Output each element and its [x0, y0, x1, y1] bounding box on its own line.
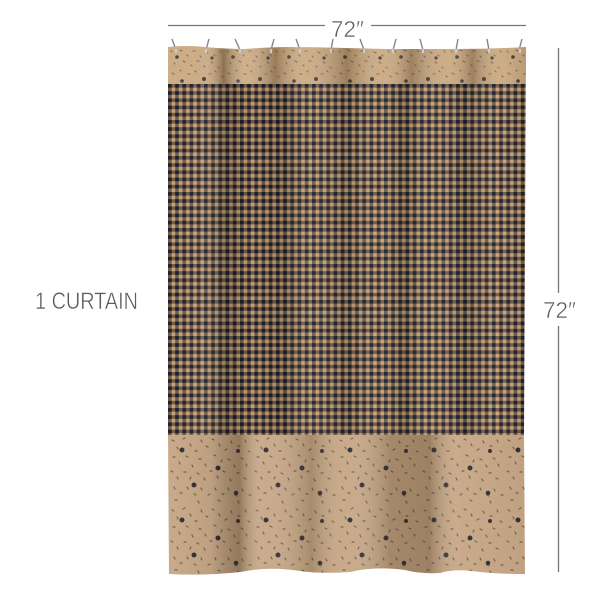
curtain: [165, 44, 530, 577]
width dimension line: [168, 24, 526, 26]
gingham fold shading: [165, 84, 530, 435]
gingham panel: [165, 84, 530, 435]
height dimension line: [558, 48, 560, 572]
quantity label: 1 CURTAIN: [35, 288, 138, 315]
width label: 72″: [331, 16, 364, 42]
hook tips: [175, 49, 521, 53]
top floral band: [165, 44, 530, 84]
top band fold shading: [165, 44, 530, 84]
curtain hooks: [172, 39, 522, 50]
bottom floral ruffle: [165, 435, 530, 577]
height label: 72″: [543, 297, 576, 323]
ruffle fold shading: [206, 435, 459, 574]
